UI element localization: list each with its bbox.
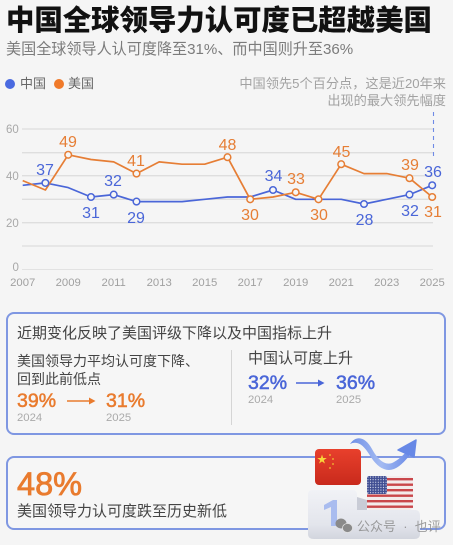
flag: USA: [367, 476, 413, 510]
legend item: China: [5, 76, 46, 91]
x axis labels: 2025: [420, 277, 445, 289]
USA value labels: 30: [241, 207, 259, 224]
sub-block: China rise: [248, 350, 375, 406]
China value labels: 29: [127, 210, 145, 227]
sub-block: USA decline: [17, 353, 199, 424]
China year labels: [248, 394, 361, 406]
watermark: 公众号 · 也评: [357, 519, 441, 534]
legend item: USA: 美国: [68, 76, 94, 91]
legend: [5, 76, 94, 91]
flag: China: [315, 449, 361, 485]
USA year labels: 2025: [106, 412, 131, 424]
USA year labels: 2024: [17, 412, 42, 424]
x axis labels: 2017: [238, 277, 263, 289]
China 2025 value: 36%: [336, 372, 375, 394]
series: USA: [23, 155, 432, 199]
y axis labels: 40: [6, 171, 19, 183]
record low text: 美国领导力认可度跌至历史新低: [17, 503, 227, 520]
x axis labels: 2009: [56, 277, 81, 289]
China value labels: 28: [356, 212, 374, 229]
China 2024 value: 32%: [248, 372, 287, 394]
y axis labels: 0: [12, 262, 19, 274]
series: China: [23, 183, 432, 204]
podium number 1: [324, 500, 337, 526]
USA arrow: [67, 398, 96, 404]
panel: recent changes: [6, 312, 446, 435]
China arrow: [296, 380, 324, 386]
flag: China: ★: [317, 455, 327, 466]
podium: [308, 490, 420, 539]
arrow: [350, 438, 416, 470]
USA value labels: 30: [310, 207, 328, 224]
x axis labels: 2013: [147, 277, 172, 289]
x axis labels: 2023: [374, 277, 399, 289]
annotation note: 中国领先5个百分点，这是近20年来: [239, 76, 446, 91]
annotation note: [239, 76, 446, 108]
China year labels: 2025: [336, 394, 361, 406]
line chart: [6, 112, 445, 289]
big number: 48%: [17, 466, 82, 502]
x axis labels: [10, 277, 445, 289]
title: 中国全球领导力认可度已超越美国: [6, 5, 432, 37]
USA value labels: 33: [287, 171, 305, 188]
legend item: China: 中国: [20, 76, 46, 91]
x axis labels: 2021: [329, 277, 354, 289]
USA decline text: [17, 353, 199, 387]
x axis labels: 2007: [10, 277, 35, 289]
China value labels: 32: [104, 173, 122, 190]
China value labels: [36, 162, 442, 229]
subtitle: 美国全球领导人认可度降至31%、而中国则升至36%: [6, 41, 353, 58]
y axis labels: 20: [6, 218, 19, 230]
China year labels: 2024: [248, 394, 273, 406]
China rise text: 中国认可度上升: [248, 350, 353, 367]
legend item: USA: [54, 76, 94, 91]
y axis labels: 60: [6, 124, 19, 136]
USA value labels: 39: [401, 157, 419, 174]
USA value labels: 41: [127, 153, 145, 170]
USA markers: [65, 152, 436, 203]
panel: record low: [6, 456, 446, 530]
x axis labels: 2015: [192, 277, 217, 289]
China value labels: 34: [265, 168, 282, 185]
USA value labels: 49: [59, 134, 77, 151]
China value labels: 37: [36, 162, 54, 179]
USA decline text: 回到此前低点: [17, 371, 101, 387]
y axis labels: [6, 124, 19, 274]
USA value labels: 45: [333, 144, 350, 161]
USA 2025 value: 31%: [106, 390, 145, 412]
annotation note: 出现的最大领先幅度: [327, 93, 446, 108]
USA value labels: 31: [424, 204, 442, 221]
China value labels: 32: [401, 203, 419, 220]
USA year labels: [17, 412, 131, 424]
USA decline text: 美国领导力平均认可度下降、: [17, 353, 199, 369]
callout dashed line: [432, 112, 434, 159]
USA 2024 value: 39%: [17, 390, 56, 412]
China value labels: 31: [82, 205, 100, 222]
China markers: [42, 180, 436, 207]
panel heading: 近期变化反映了美国评级下降以及中国指标上升: [17, 325, 332, 342]
China value labels: 36: [424, 164, 442, 181]
USA value labels: 48: [219, 137, 236, 154]
USA value labels: [59, 134, 442, 224]
x axis labels: 2019: [283, 277, 308, 289]
x axis labels: 2011: [102, 277, 126, 289]
